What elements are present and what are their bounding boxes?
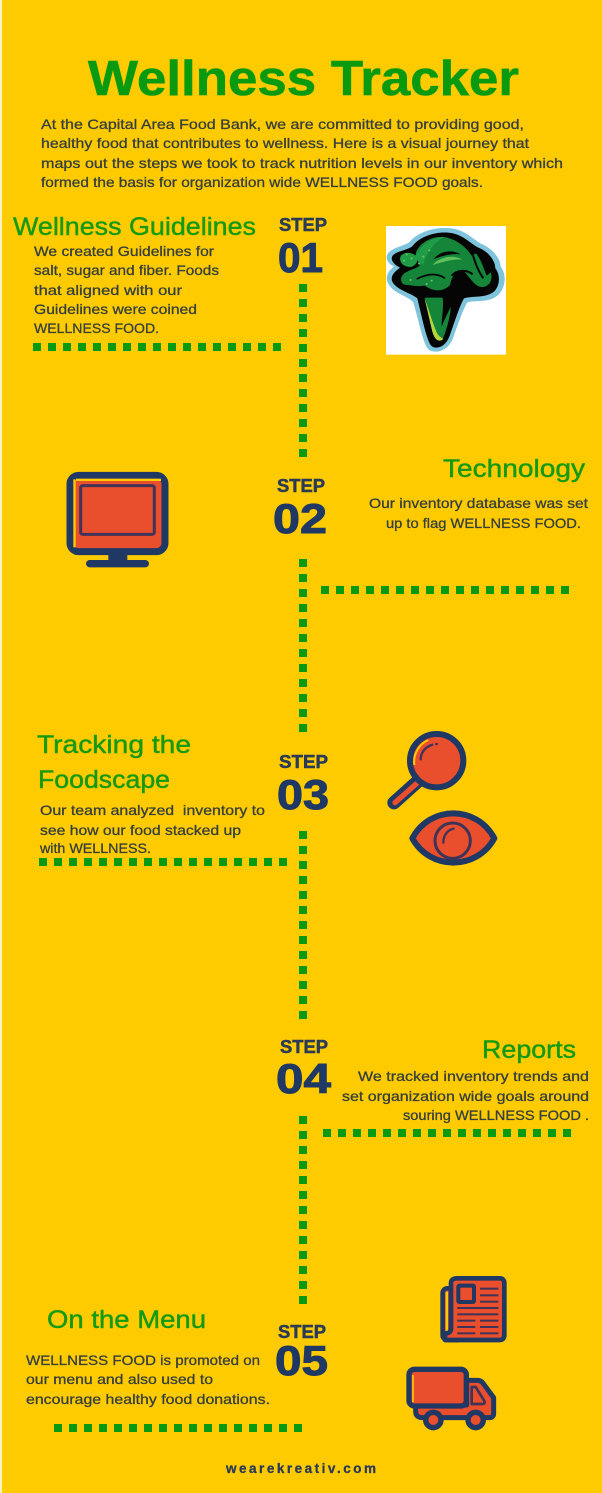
step 3 label: 03 — [277, 771, 329, 818]
step 4 label: 04 — [276, 1055, 332, 1102]
step 2 label: 02 — [273, 495, 327, 542]
icon: broccoli — [386, 226, 506, 355]
heading: tracking the foodscape: Tracking the — [37, 731, 191, 759]
text: step 3 description — [39, 802, 265, 856]
icon: computer monitor — [70, 475, 165, 567]
step 3 label: STEP — [279, 751, 328, 772]
intro text — [41, 116, 563, 190]
text: step 2 description: up to flag WELLNESS FOOD. — [386, 515, 581, 531]
text: step 2 description — [369, 495, 588, 531]
step 3 label — [277, 751, 329, 818]
step 1 label: 01 — [278, 234, 323, 281]
text: step 3 description: Our team analyzed inventory to — [40, 802, 265, 818]
icon: eye — [412, 813, 494, 863]
text: step 4 description: set organization wide goals around — [342, 1088, 589, 1104]
panel: step 5 on the menu — [26, 1278, 504, 1428]
step 5 label — [275, 1321, 328, 1384]
icon: delivery truck — [409, 1369, 494, 1428]
text: step 5 description: encourage healthy food donations. — [26, 1391, 270, 1407]
step 5 label: 05 — [275, 1337, 328, 1384]
text: step 3 description: see how our food stacked up — [40, 822, 241, 838]
text: step 2 description: Our inventory database was set — [369, 495, 588, 511]
text: step 1 description: Guidelines were coined — [34, 301, 197, 317]
heading: tracking the foodscape: Foodscape — [38, 766, 170, 794]
step 2 label: STEP — [277, 475, 325, 496]
footer credit: wearekreativ.com — [225, 1461, 376, 1476]
icon: newspaper — [443, 1278, 504, 1340]
step 5 label: STEP — [278, 1321, 326, 1342]
panel: step 4 reports — [276, 1036, 589, 1304]
panel: step 1 wellness guidelines — [13, 213, 506, 459]
step 2 label — [273, 475, 327, 542]
text: step 4 description — [342, 1068, 589, 1123]
text: step 1 description: salt, sugar and fiber. Foods — [34, 262, 219, 278]
step 4 label — [276, 1036, 332, 1102]
text: step 1 description: that aligned with our — [34, 282, 182, 298]
intro text: healthy food that contributes to wellness. Here is a visual journey that — [41, 135, 529, 151]
icon: magnifying glass — [394, 734, 463, 803]
text: step 1 description — [34, 243, 219, 336]
panel: step 3 tracking the foodscape — [37, 731, 494, 1019]
title: Wellness Tracker — [88, 52, 519, 106]
intro text: At the Capital Area Food Bank, we are committed to providing good, — [41, 116, 524, 132]
heading: wellness guidelines: Wellness Guidelines — [13, 213, 256, 241]
text: step 3 description: with WELLNESS. — [39, 840, 151, 856]
step 1 label — [278, 214, 327, 281]
heading: technology: Technology — [443, 455, 586, 483]
panel: step 2 technology — [70, 455, 588, 734]
text: step 1 description: WELLNESS FOOD. — [34, 320, 159, 336]
text: step 1 description: We created Guidelines for — [34, 243, 214, 259]
text: step 5 description: our menu and also used to — [26, 1371, 213, 1387]
step 4 label: STEP — [280, 1036, 328, 1057]
text: step 4 description: souring WELLNESS FOOD . — [403, 1107, 589, 1123]
intro text: formed the basis for organization wide WELLNESS FOOD goals. — [41, 174, 483, 190]
heading: on the menu: On the Menu — [47, 1306, 206, 1334]
heading: tracking the foodscape — [37, 731, 191, 794]
text: step 5 description — [26, 1352, 270, 1407]
step 1 label: STEP — [279, 214, 327, 235]
heading: reports: Reports — [482, 1036, 576, 1064]
text: step 4 description: We tracked inventory trends and — [358, 1068, 589, 1084]
intro text: maps out the steps we took to track nutrition levels in our inventory which — [41, 155, 563, 171]
text: step 5 description: WELLNESS FOOD is promoted on — [26, 1352, 260, 1368]
